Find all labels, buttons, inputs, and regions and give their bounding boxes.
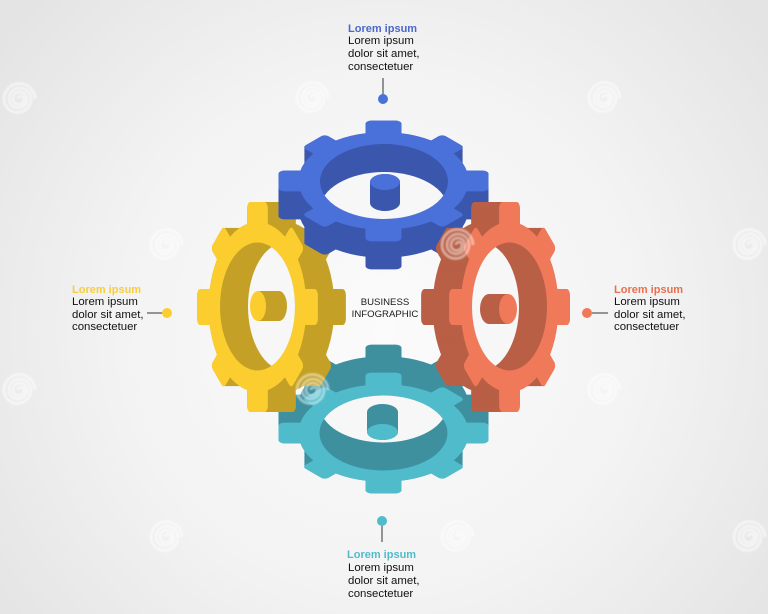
callout: top blue: Lorem ipsum bbox=[348, 23, 417, 35]
callout: right red: Lorem ipsum bbox=[614, 284, 683, 296]
gear: teal bottom bbox=[278, 345, 488, 493]
callout: left yellow bbox=[72, 284, 172, 333]
callout: bottom teal: Lorem ipsum bbox=[347, 549, 416, 561]
background spiral marks bbox=[4, 83, 765, 550]
callout: bottom teal: consectetuer bbox=[348, 588, 413, 600]
callout: left yellow: Lorem ipsum bbox=[72, 296, 138, 308]
callout: top blue bbox=[348, 23, 420, 104]
callout: right red: dolor sit amet, bbox=[614, 309, 686, 321]
callout: bottom teal bbox=[347, 516, 420, 600]
icon: teal axle bbox=[367, 404, 398, 440]
callout: top blue: Lorem ipsum bbox=[348, 35, 414, 47]
callout: right red: consectetuer bbox=[614, 321, 679, 333]
center label: BUSINESS bbox=[361, 297, 409, 308]
center label: INFOGRAPHIC bbox=[352, 309, 418, 320]
icon: yellow axle bbox=[250, 291, 287, 321]
gear: blue top bbox=[278, 121, 488, 269]
callout: top blue: dolor sit amet, bbox=[348, 48, 420, 60]
spiral marks over gears bbox=[297, 230, 473, 404]
gear: yellow left bbox=[197, 202, 346, 412]
callout: bottom teal: dolor sit amet, bbox=[348, 575, 420, 587]
callout: top blue: consectetuer bbox=[348, 61, 413, 73]
icon: blue axle bbox=[370, 174, 400, 211]
icon: red axle bbox=[480, 294, 517, 324]
callout: left yellow: Lorem ipsum bbox=[72, 284, 141, 296]
callout: left yellow: dolor sit amet, bbox=[72, 309, 144, 321]
callout: right red: Lorem ipsum bbox=[614, 296, 680, 308]
callout: left yellow: consectetuer bbox=[72, 321, 137, 333]
gear: red right bbox=[421, 202, 570, 412]
callout: right red bbox=[582, 284, 686, 333]
center label bbox=[352, 297, 418, 320]
callout: bottom teal: Lorem ipsum bbox=[348, 562, 414, 574]
